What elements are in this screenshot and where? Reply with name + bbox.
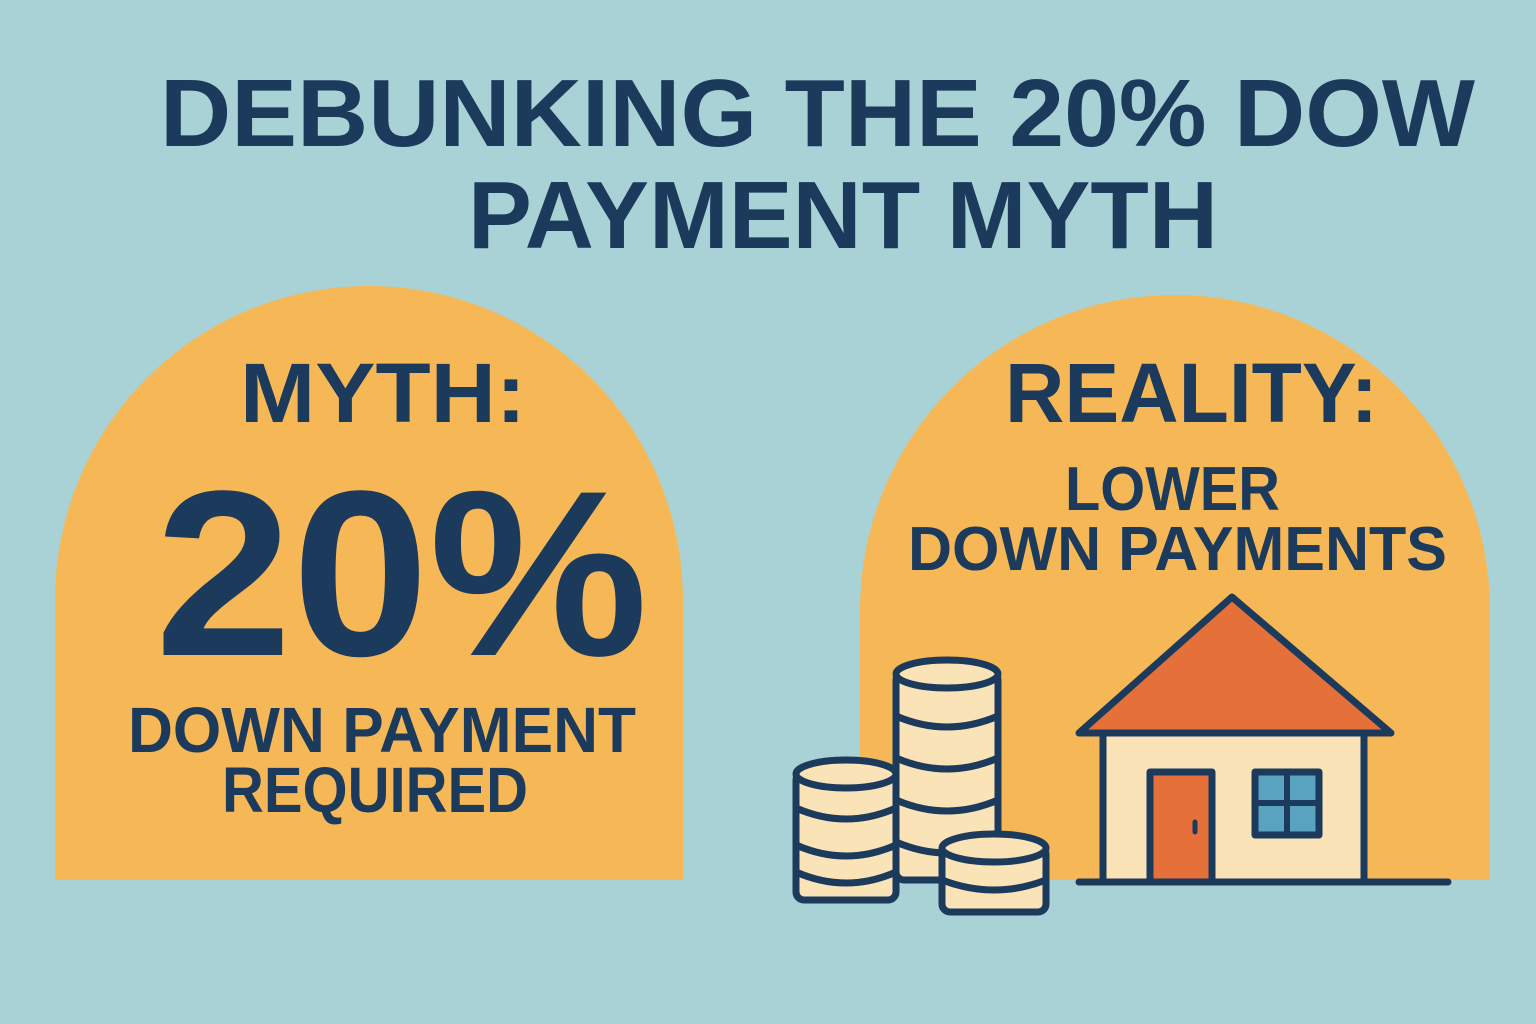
myth heading: MYTH: <box>240 346 526 440</box>
small stack <box>942 834 1046 912</box>
reality description: LOWER <box>1065 455 1280 524</box>
panel: reality <box>860 295 1490 880</box>
title: PAYMENT MYTH <box>468 162 1218 269</box>
door <box>1150 772 1212 882</box>
reality description: DOWN PAYMENTS <box>908 515 1447 584</box>
icon: house <box>1079 597 1448 882</box>
title: DEBUNKING THE 20% DOW <box>160 60 1475 167</box>
title <box>160 60 1475 269</box>
left stack <box>796 760 896 900</box>
panel: myth <box>55 286 683 880</box>
window <box>1255 772 1319 835</box>
myth description: DOWN PAYMENT <box>128 694 636 766</box>
icon: coin stacks <box>796 660 1046 912</box>
myth description: REQUIRED <box>222 754 528 826</box>
reality heading: REALITY: <box>1005 346 1378 440</box>
big number 20%: 20% <box>155 442 648 706</box>
tall stack <box>896 660 998 880</box>
